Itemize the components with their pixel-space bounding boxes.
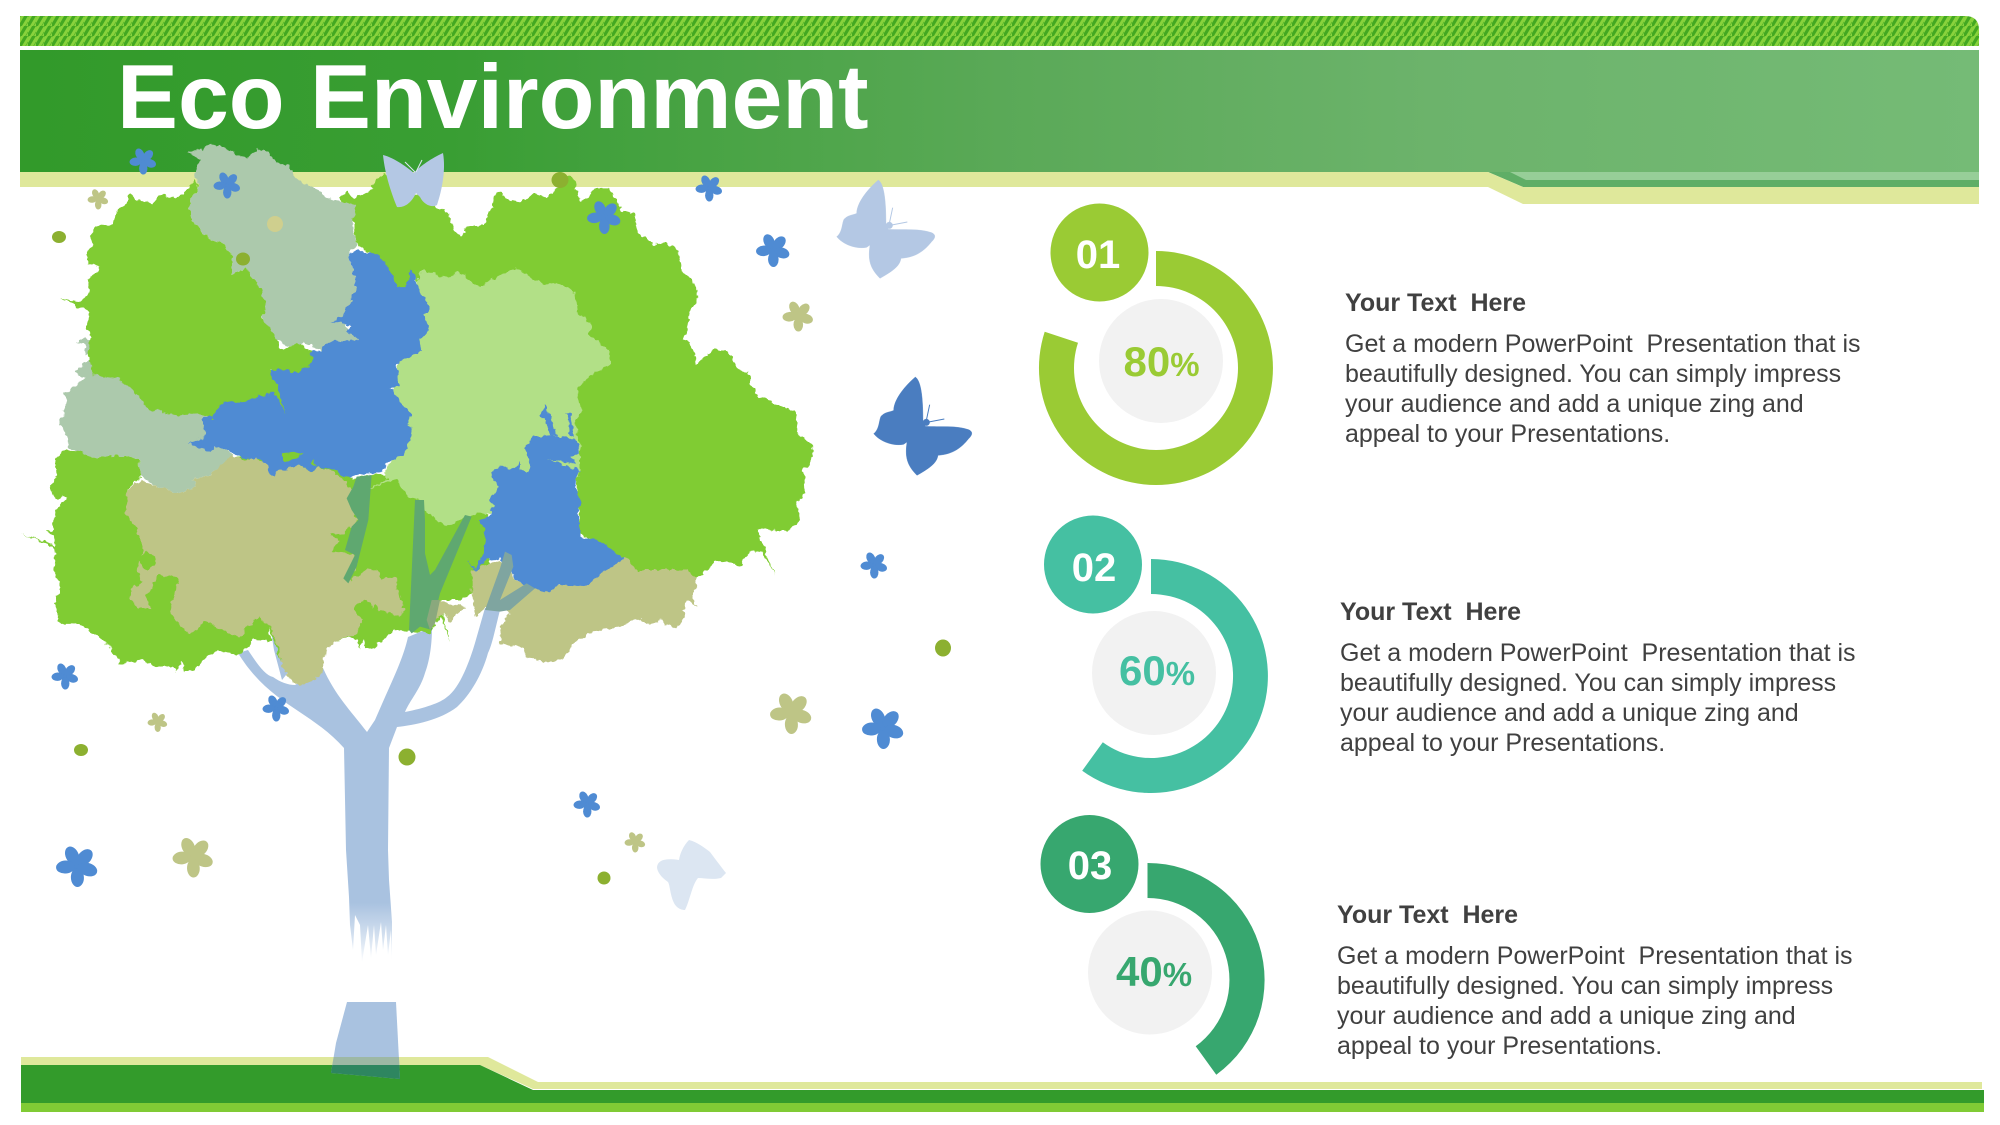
badge label 03: 03	[1068, 844, 1112, 888]
text block 03: Get a modern PowerPoint Presentation that is	[1337, 942, 1853, 970]
canopy: upper sage patch	[187, 143, 360, 350]
number badge 02	[1044, 516, 1142, 614]
number badge 03	[1040, 815, 1138, 913]
text block 02: beautifully designed. You can simply impress	[1340, 669, 1836, 697]
ring 80 percent	[1039, 251, 1273, 485]
canopy: right blue patch	[467, 435, 623, 593]
infographic item 03	[1040, 815, 1853, 1075]
branch overlap: centre fork	[409, 500, 472, 633]
infographic item 01	[1039, 204, 1861, 485]
text block 01: beautifully designed. You can simply impress	[1345, 360, 1841, 388]
ring 40 percent	[1148, 863, 1265, 1075]
header step shape	[1488, 172, 1979, 187]
text block 02: Your Text Here	[1340, 598, 1521, 626]
canopy: light green patch	[362, 268, 610, 527]
ring 60 percent	[1082, 559, 1268, 793]
tree canopy	[20, 143, 813, 685]
khaki flowers	[87, 188, 814, 878]
value disc 40 percent	[1088, 910, 1212, 1034]
text block 03: appeal to your Presentations.	[1337, 1032, 1662, 1060]
canopy: upper left green mass	[60, 180, 312, 418]
branch overlap: khaki section	[427, 600, 440, 630]
number badge 01	[1050, 204, 1148, 302]
title: Eco Environment	[117, 46, 869, 148]
branch overlap: right fork	[485, 552, 535, 612]
text block 01: Your Text Here	[1345, 289, 1526, 317]
branches seen through canopy	[343, 475, 535, 633]
branch overlap: left fork	[343, 475, 372, 583]
tree trunk and branches	[238, 608, 500, 962]
value disc 60 percent	[1092, 611, 1216, 735]
canopy: lower green mass	[20, 447, 490, 672]
text block 01	[1345, 289, 1861, 448]
text block 02: Get a modern PowerPoint Presentation that is	[1340, 639, 1856, 667]
olive dots	[52, 172, 951, 884]
value 40 percent: 40%	[1116, 948, 1192, 995]
infographic item 02	[1044, 516, 1856, 793]
canopy: blue drips	[540, 405, 574, 437]
text block 03: Your Text Here	[1337, 901, 1518, 929]
footer band	[21, 1057, 1984, 1112]
text block 02: your audience and add a unique zing and	[1340, 699, 1799, 727]
butterfly: light blue	[837, 180, 935, 278]
value disc 80 percent	[1099, 299, 1223, 423]
text block 02: appeal to your Presentations.	[1340, 729, 1665, 757]
text block 03	[1337, 901, 1853, 1060]
canopy: green bumps	[139, 452, 372, 617]
blue flowers	[51, 147, 905, 887]
canopy: right khaki patch	[472, 557, 698, 663]
butterfly: dark blue	[874, 377, 972, 475]
canopy: lower sage patch	[60, 360, 243, 493]
text block 03: your audience and add a unique zing and	[1337, 1002, 1796, 1030]
header banner	[20, 50, 1979, 204]
butterfly: faint	[657, 840, 726, 910]
value 60 percent: 60%	[1119, 647, 1195, 694]
butterfly: on header	[383, 153, 444, 207]
canopy: left khaki patch	[125, 455, 405, 685]
top hatched band	[20, 16, 1979, 46]
tree base	[331, 1002, 400, 1079]
text block 01: Get a modern PowerPoint Presentation that is	[1345, 330, 1861, 358]
thin branch sliver	[270, 625, 290, 680]
canopy: small sage fleck	[76, 337, 93, 357]
text block 03: beautifully designed. You can simply impress	[1337, 972, 1833, 1000]
text block 02	[1340, 598, 1856, 757]
value 80 percent: 80%	[1123, 338, 1200, 385]
text block 01: your audience and add a unique zing and	[1345, 390, 1804, 418]
header pale band	[20, 172, 1979, 204]
badge label 01: 01	[1076, 233, 1120, 277]
canopy: small khaki fleck	[432, 600, 467, 623]
header highlight stripe	[1510, 172, 1979, 180]
badge label 02: 02	[1072, 546, 1116, 590]
canopy: blue patch	[188, 250, 429, 479]
canopy: upper right green mass	[340, 175, 813, 580]
text block 01: appeal to your Presentations.	[1345, 420, 1670, 448]
